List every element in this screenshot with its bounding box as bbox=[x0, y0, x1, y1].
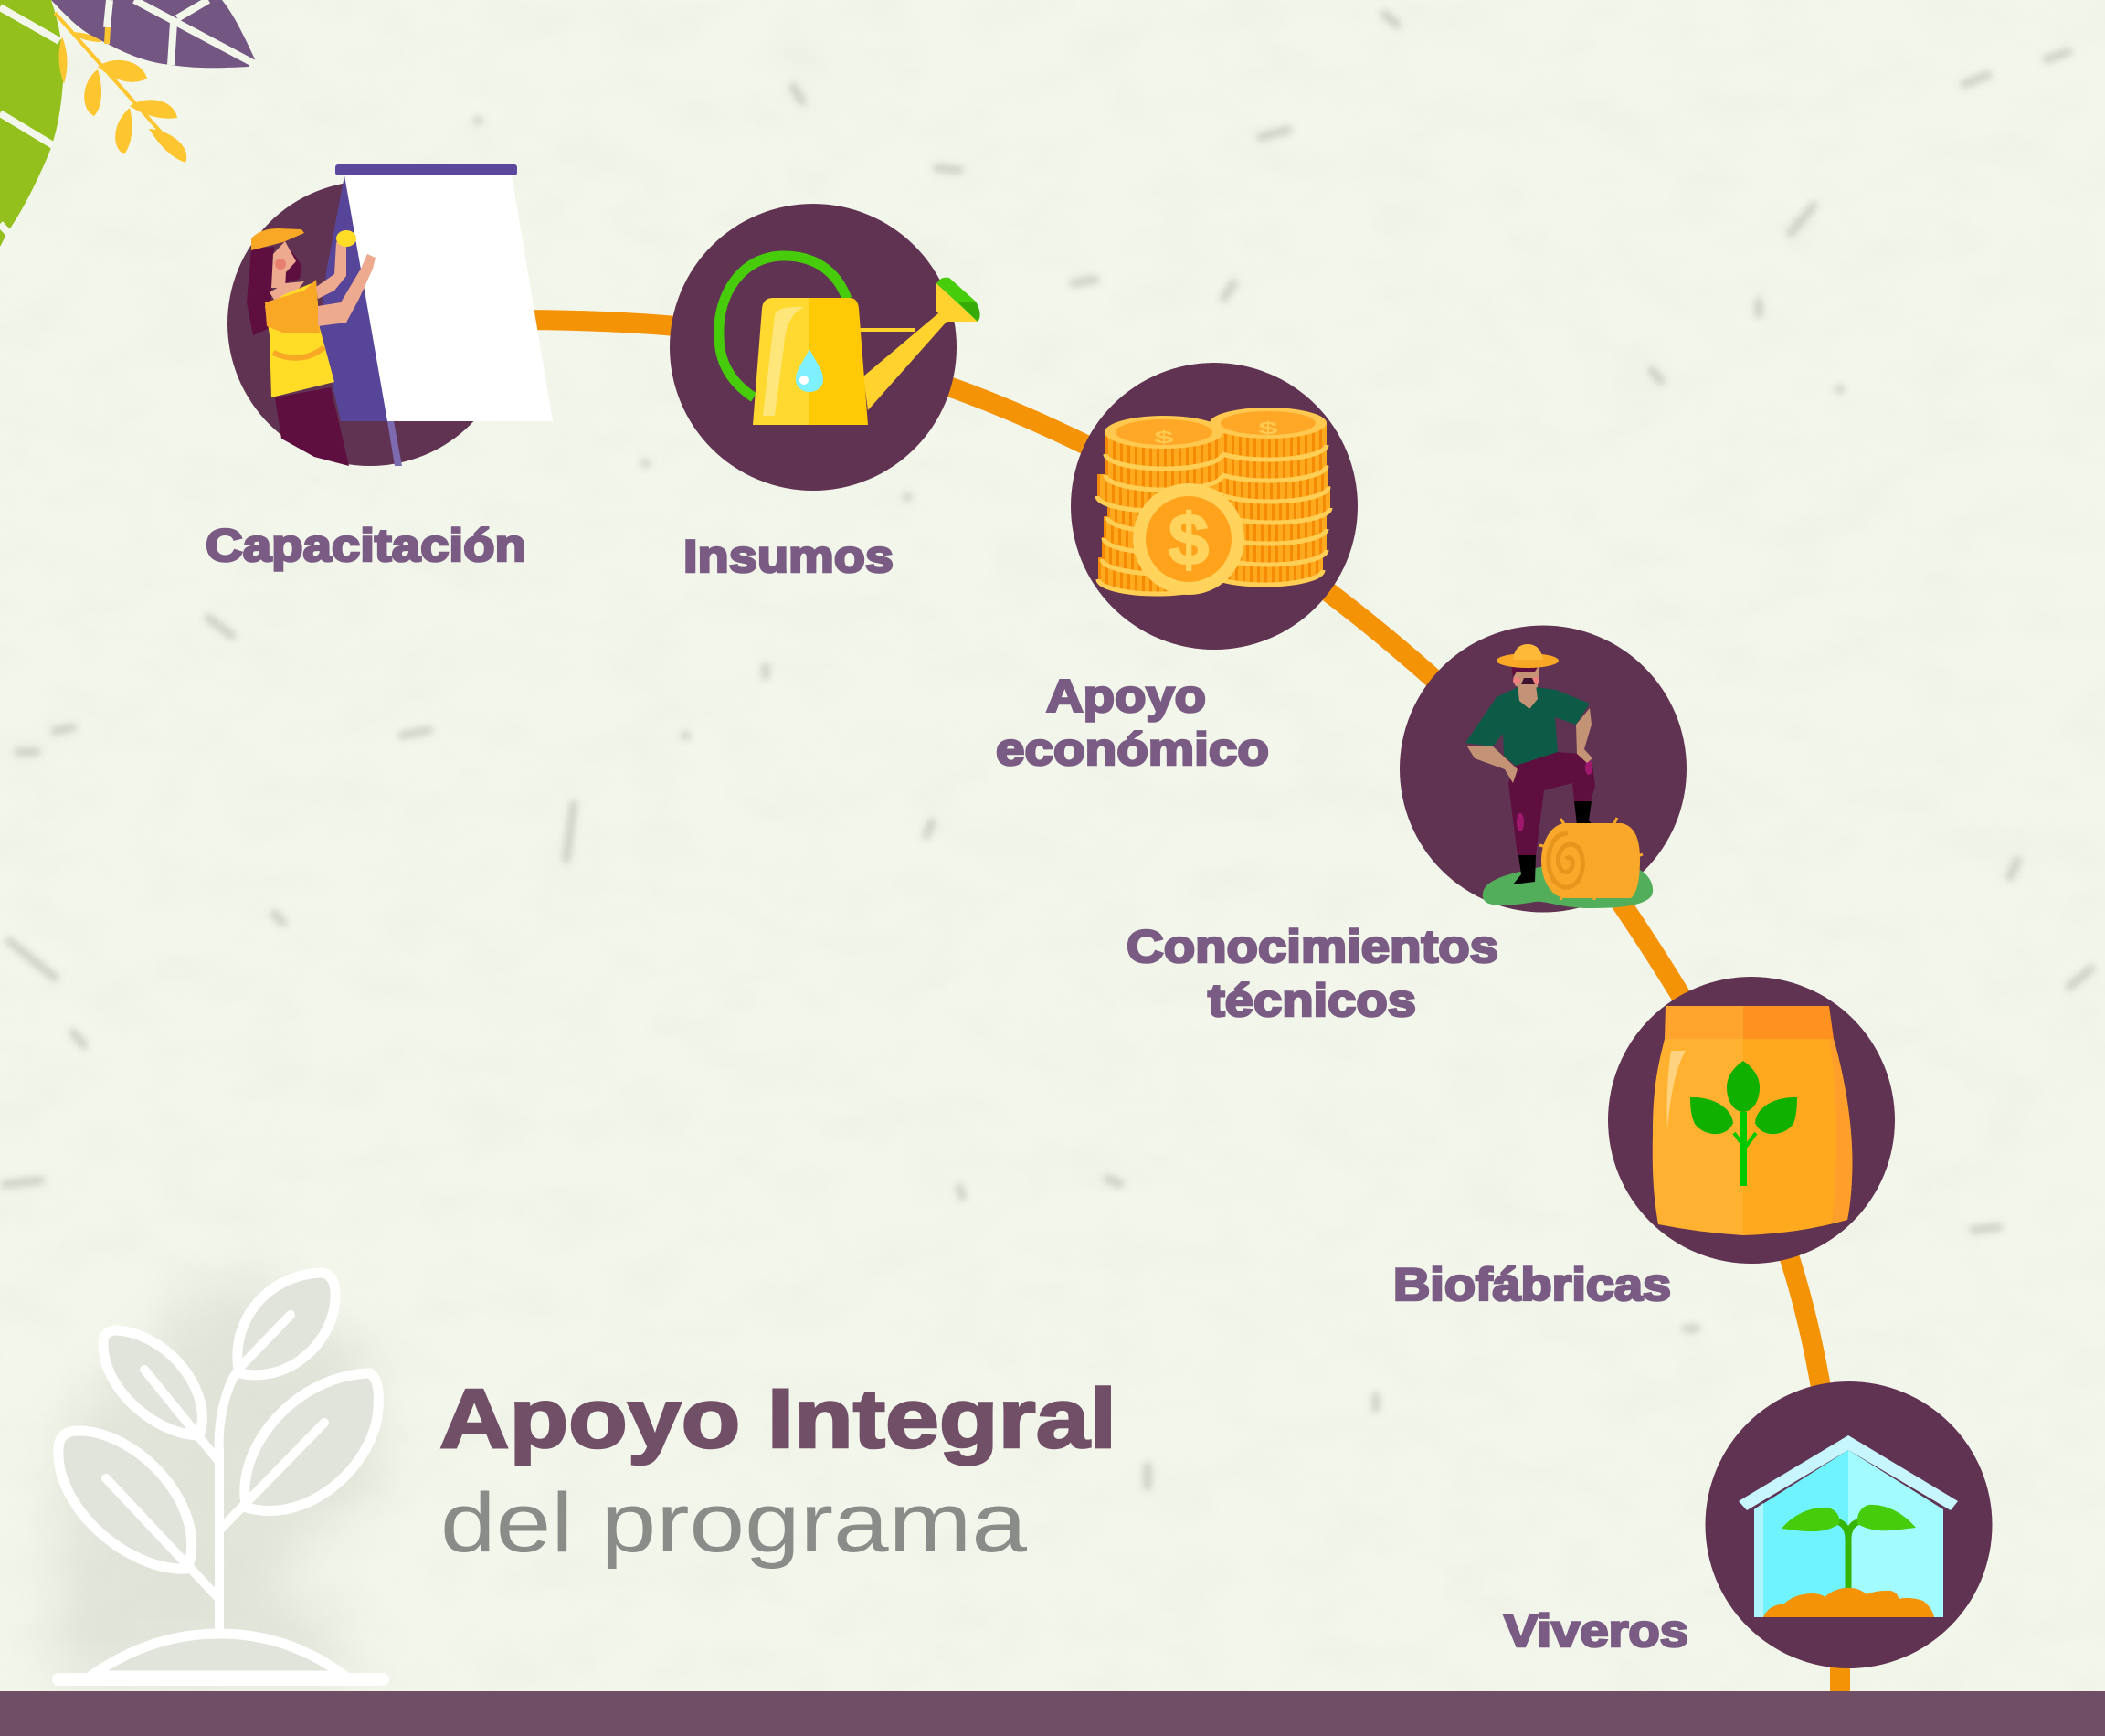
step 3: apoyo económico icon bbox=[1071, 363, 1358, 650]
label: Viveros: Viveros bbox=[1504, 1605, 1688, 1657]
plant on bag bbox=[1690, 1061, 1797, 1186]
circle bbox=[1705, 1381, 1992, 1668]
right coin stack: $ bbox=[1258, 419, 1278, 438]
yellow sprig bbox=[55, 13, 186, 163]
woman bbox=[247, 228, 376, 466]
purple leaf bbox=[51, 0, 255, 68]
right coin stack bbox=[1206, 408, 1330, 585]
label: Apoyo económico bbox=[996, 671, 1269, 775]
big coin: $ bbox=[1169, 499, 1209, 580]
circle bbox=[227, 181, 513, 466]
left coin stack: $ bbox=[1154, 429, 1174, 447]
soil bbox=[1763, 1588, 1934, 1617]
footer band bbox=[0, 1691, 2105, 1736]
hay bale bbox=[1539, 818, 1643, 900]
title bbox=[439, 1372, 1116, 1570]
label: Capacitación: Capacitación bbox=[206, 520, 526, 571]
label: Apoyo económico: Apoyo bbox=[1046, 671, 1206, 722]
circle bbox=[1608, 977, 1895, 1264]
label: Conocimientos técnicos bbox=[1127, 921, 1498, 1026]
sprout bbox=[1782, 1505, 1916, 1590]
title: Apoyo Integral bbox=[439, 1372, 1116, 1466]
seed bag bbox=[1653, 1006, 1852, 1235]
step 4: conocimientos técnicos icon bbox=[1400, 625, 1687, 912]
big coin bbox=[1133, 483, 1244, 595]
watering can bbox=[719, 256, 980, 425]
label: Insumos: Insumos bbox=[683, 531, 894, 582]
step 5: biofábricas icon bbox=[1608, 977, 1895, 1264]
left coin stack bbox=[1097, 416, 1224, 594]
icon: white plant outline bbox=[55, 1270, 384, 1681]
circle bbox=[670, 204, 957, 491]
green leaf bbox=[0, 0, 63, 247]
label: Conocimientos técnicos: técnicos bbox=[1208, 975, 1416, 1026]
step 6: viveros icon bbox=[1705, 1381, 1992, 1668]
step 2: insumos icon bbox=[670, 204, 980, 491]
label: Conocimientos técnicos: Conocimientos bbox=[1127, 921, 1498, 972]
greenhouse bbox=[1739, 1435, 1958, 1617]
circle bbox=[1400, 625, 1687, 912]
grass bbox=[1483, 866, 1653, 908]
label: Apoyo económico: económico bbox=[996, 724, 1269, 775]
farmer bbox=[1465, 644, 1595, 884]
flipchart bbox=[320, 164, 553, 466]
decoration: corner leaves bbox=[0, 0, 255, 247]
circle bbox=[1071, 363, 1358, 650]
path: orange connector bbox=[512, 320, 1840, 1691]
step 1: capacitación icon bbox=[227, 164, 553, 466]
title: del programa bbox=[440, 1477, 1028, 1570]
label: Biofábricas: Biofábricas bbox=[1393, 1259, 1671, 1310]
